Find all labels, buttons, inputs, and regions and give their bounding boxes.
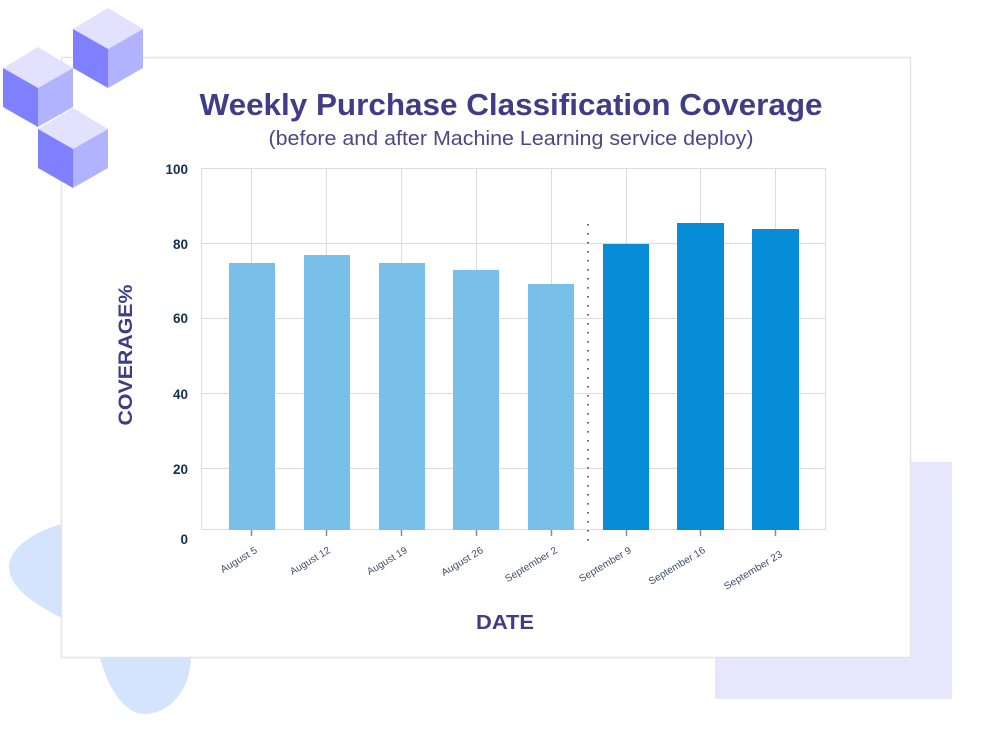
deploy divider line <box>587 224 589 548</box>
x axis date labels: September 16 <box>647 545 708 588</box>
cube top right <box>73 8 143 88</box>
chart card <box>62 58 910 658</box>
y axis labels: 60 <box>173 311 188 326</box>
y axis labels: 40 <box>173 387 188 402</box>
bars after deploy <box>603 223 799 530</box>
x axis date labels: August 12 <box>288 545 333 578</box>
y axis labels: 0 <box>180 532 188 547</box>
decorative blue blob <box>9 524 191 714</box>
x axis date labels: September 2 <box>503 545 560 585</box>
x axis title: DATE <box>476 612 534 634</box>
title: Weekly Purchase Classification Coverage <box>200 87 822 122</box>
bar chart <box>165 162 826 593</box>
x axis date labels <box>219 545 785 593</box>
y axis labels <box>165 162 188 547</box>
cube bottom <box>38 108 108 188</box>
icon: isometric cubes <box>3 8 143 188</box>
cube left <box>3 47 73 127</box>
x axis date labels: August 19 <box>365 545 410 578</box>
subtitle: (before and after Machine Learning service deploy) <box>268 128 754 150</box>
x axis date labels: August 26 <box>440 545 486 579</box>
x axis date labels: September 23 <box>722 549 785 593</box>
y axis labels: 100 <box>165 162 188 177</box>
decorative lavender square <box>715 462 952 699</box>
y axis title: COVERAGE% <box>116 284 137 426</box>
y axis labels: 20 <box>173 462 188 477</box>
y axis labels: 80 <box>173 237 188 252</box>
x axis date labels: September 9 <box>577 545 634 585</box>
x axis ticks <box>252 530 776 536</box>
x axis date labels: August 5 <box>219 545 260 576</box>
plot frame and gridlines <box>201 168 826 530</box>
bars before deploy <box>229 255 574 530</box>
